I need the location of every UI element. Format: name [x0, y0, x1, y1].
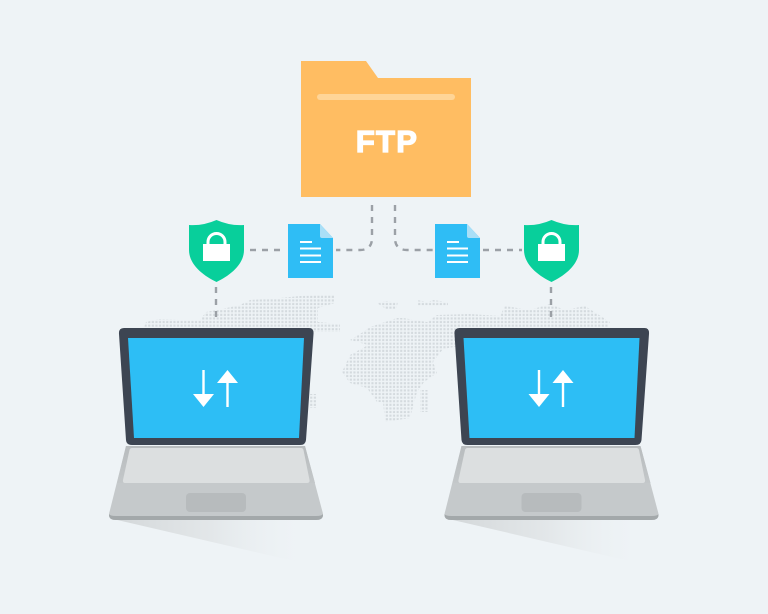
left laptop with transfer arrows: [109, 328, 323, 562]
icon: right document: [435, 224, 480, 278]
icon: left shield with padlock: [189, 220, 244, 282]
dotted world map: [143, 295, 610, 422]
icon: left document: [288, 224, 333, 278]
folder: FTP: [301, 61, 471, 197]
dashed connectors: [216, 205, 551, 322]
right laptop with transfer arrows: [444, 328, 658, 562]
folder label: FTP: [356, 124, 418, 159]
icon: right shield with padlock: [524, 220, 579, 282]
